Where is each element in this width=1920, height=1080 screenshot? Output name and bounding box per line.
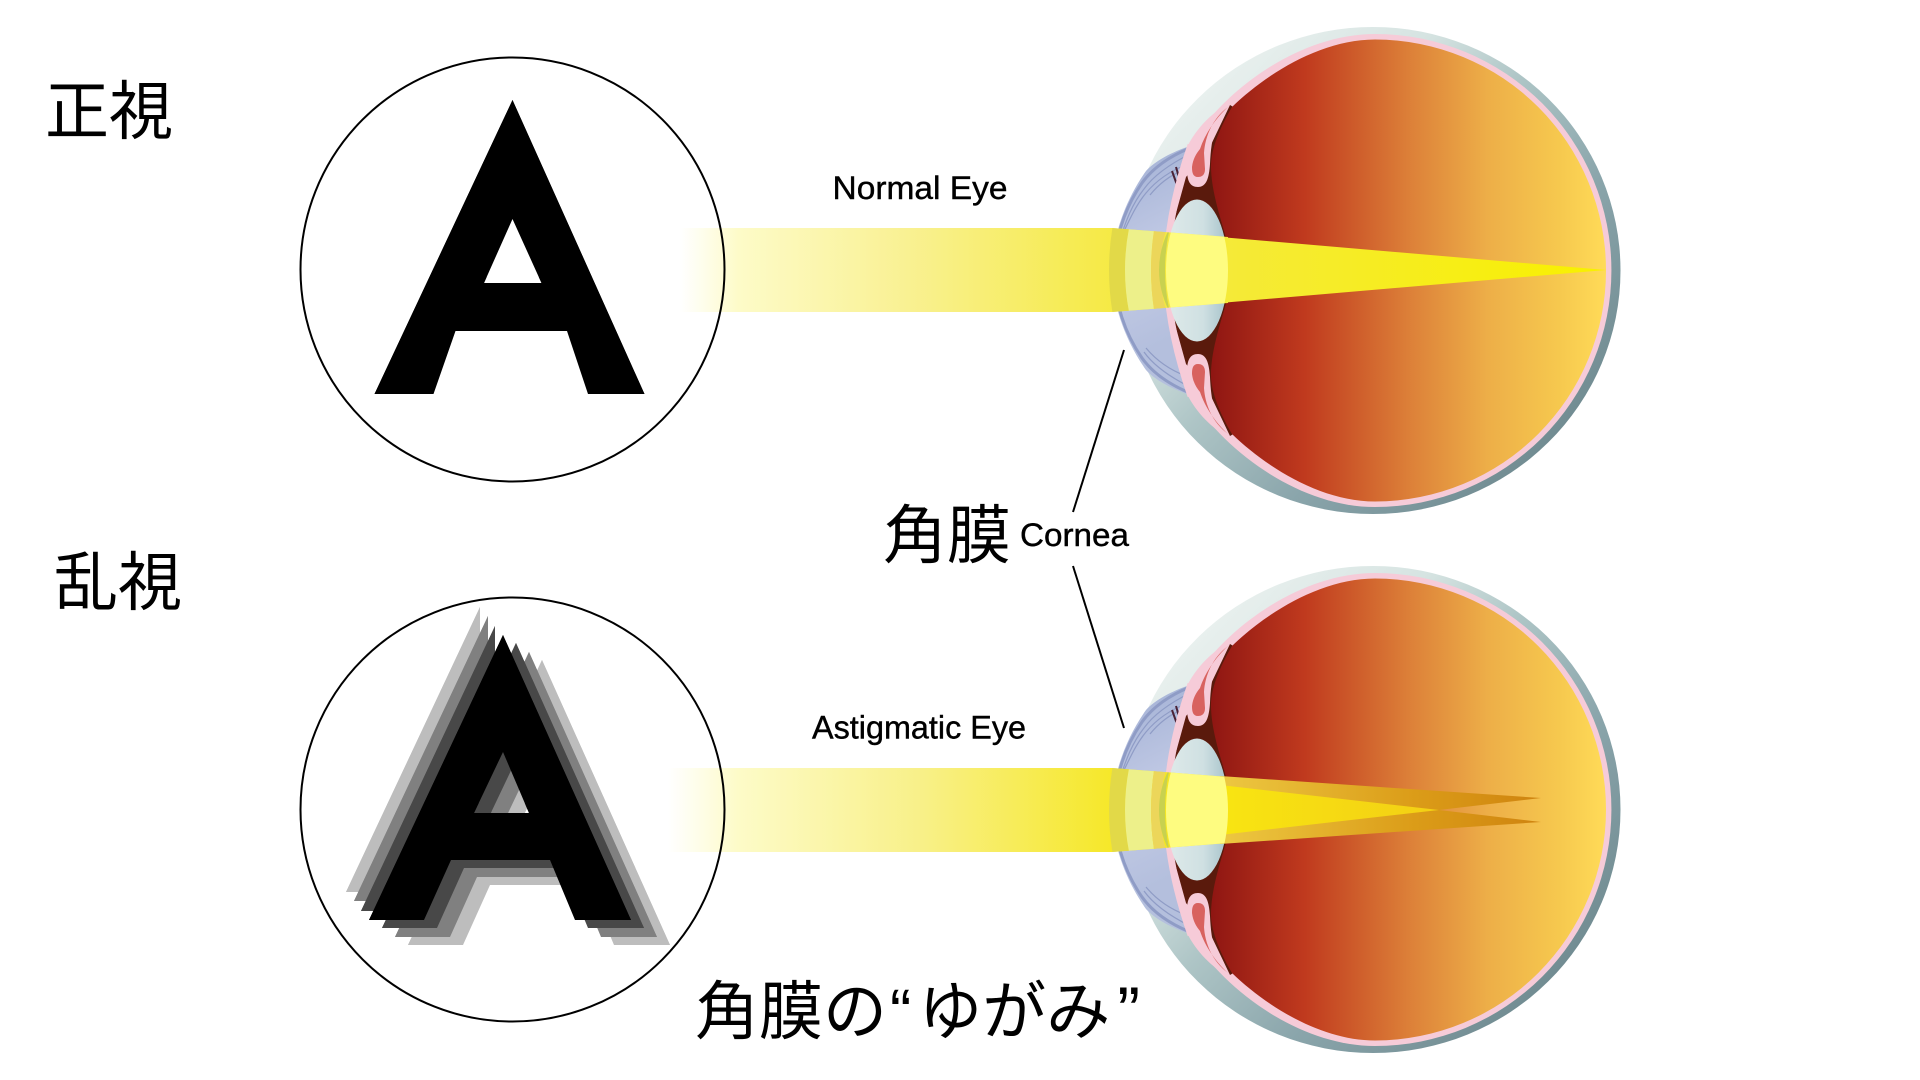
ciliary body lower [1187, 354, 1230, 438]
callout kanji: 角膜 [883, 500, 1011, 572]
label: astigmatic eye: Astigmatic Eye [812, 710, 1026, 746]
cornea [1112, 146, 1190, 395]
letter A blurred multiple images: A [367, 542, 691, 1044]
vitreous body [1211, 40, 1606, 502]
leader line to upper cornea [1073, 350, 1124, 512]
light beam: astigmatic eye [668, 740, 1541, 882]
cornea fibres [1114, 148, 1190, 393]
eye: normal eye anatomy [1112, 27, 1620, 514]
sclera [1126, 27, 1620, 514]
letter A blurred multiple images [346, 607, 670, 945]
letter A blurred multiple images: A [354, 533, 678, 1035]
converging rays [1220, 237, 1606, 303]
heading: normal vision: 正視 [45, 76, 173, 148]
circle: normal vision [300, 56, 726, 482]
choroid layer [1170, 34, 1611, 507]
label: normal eye: Normal Eye [832, 170, 1008, 206]
lens [1166, 200, 1228, 342]
letter A blurred multiple images: A [326, 506, 650, 1008]
eye: astigmatic eye anatomy [1112, 566, 1620, 1053]
callout: cornea [883, 350, 1129, 728]
letter A blurred multiple images: A [318, 497, 642, 999]
beam shaft [680, 228, 1228, 312]
split focal rays [1220, 776, 1541, 844]
circle: astigmatic vision [300, 596, 726, 1022]
caption: corneal distortion: 角膜の“ゆがみ” [695, 973, 1140, 1049]
heading: astigmatism: 乱視 [54, 547, 182, 619]
brown region behind iris [1168, 105, 1240, 436]
beam through cornea and lens [1109, 740, 1228, 882]
letter A sharp: A [350, 0, 675, 501]
iris band [1167, 145, 1191, 396]
beam shaft [668, 768, 1228, 852]
letter A blurred multiple images: A [380, 550, 704, 1052]
leader line to lower cornea [1073, 566, 1124, 728]
letter A blurred multiple images: A [333, 516, 657, 1018]
letter A blurred multiple images: A [341, 525, 665, 1027]
light beam: normal eye [690, 228, 1606, 312]
ciliary body upper [1187, 103, 1230, 187]
callout english: Cornea [1020, 517, 1129, 553]
beam through cornea and lens [1109, 200, 1228, 342]
